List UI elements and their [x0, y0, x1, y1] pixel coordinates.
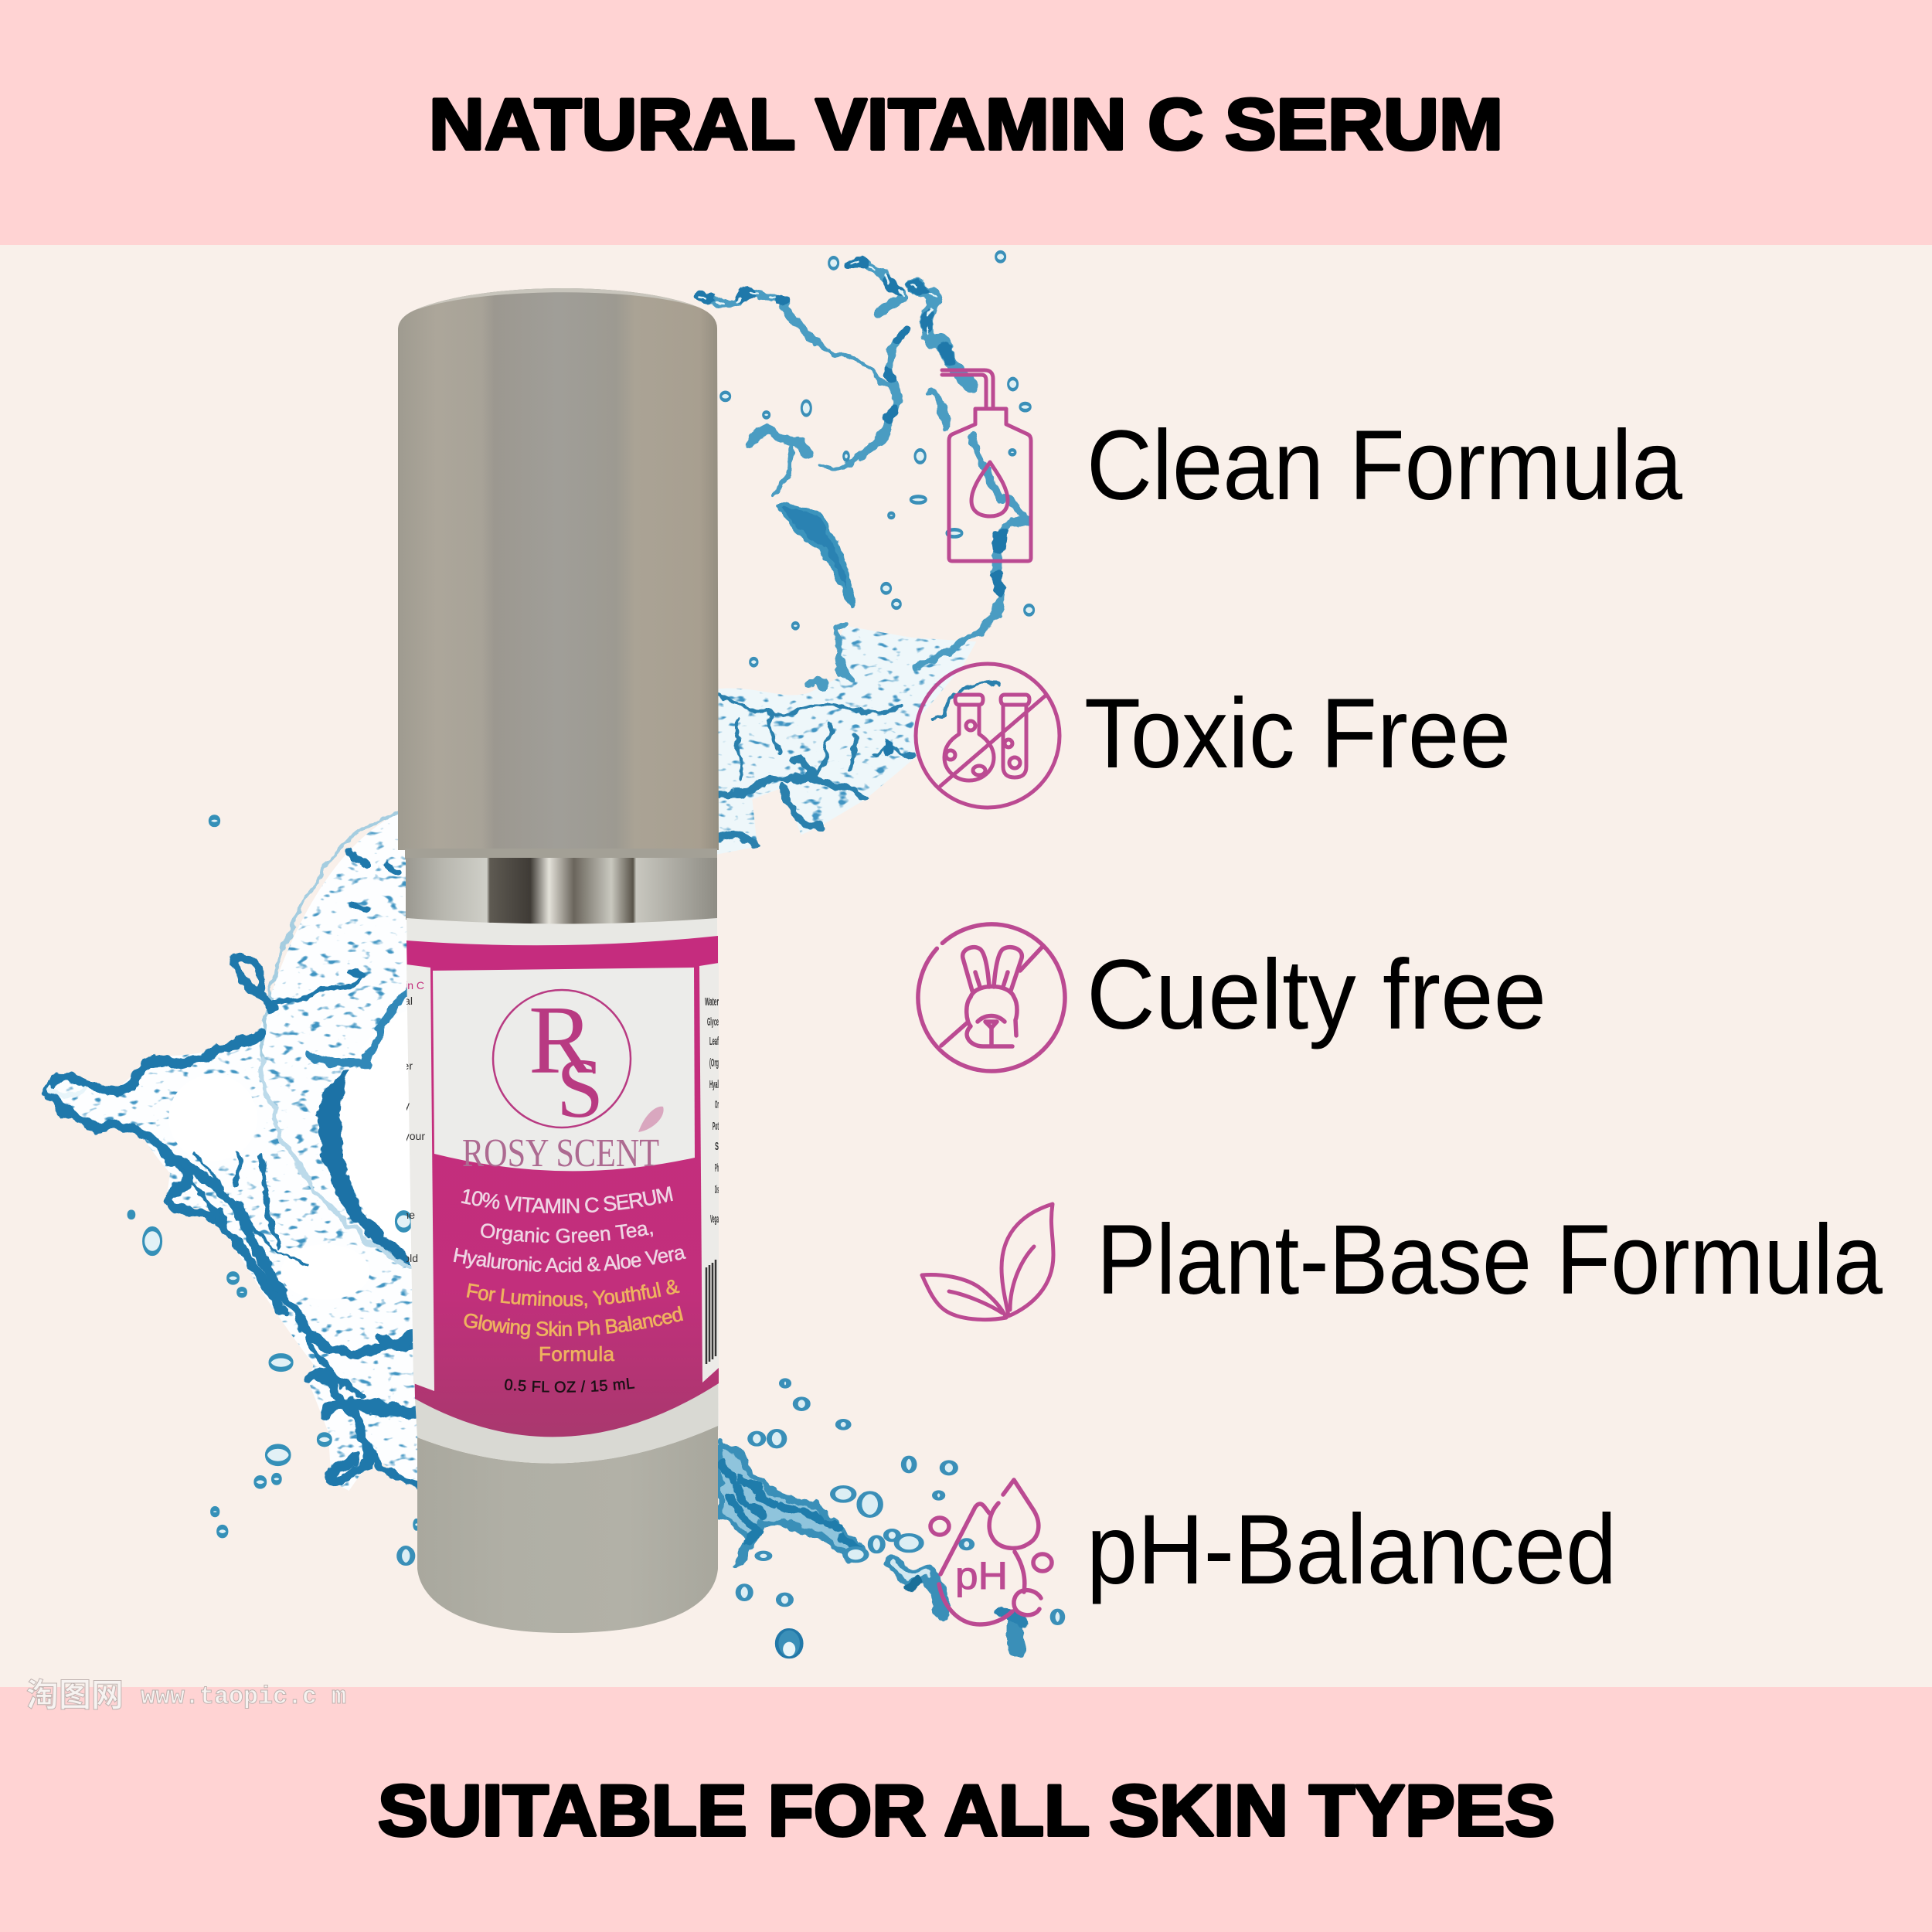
- text: (Org: [709, 1056, 719, 1070]
- bottle body: [406, 918, 719, 1463]
- label left panel: in C: [405, 979, 424, 992]
- text: Or: [715, 1098, 719, 1111]
- chrome band: [406, 858, 717, 926]
- label left panel: [406, 964, 434, 1391]
- bottom banner: [0, 1687, 1932, 1932]
- serum bottle: [398, 288, 719, 1633]
- water droplets: [400, 1379, 1063, 1658]
- watermark: 淘图网: [26, 1669, 124, 1716]
- footer heading: SUITABLE FOR ALL SKIN TYPES: [378, 1770, 1555, 1851]
- label text: Organic Green Tea,: [481, 1223, 653, 1244]
- water strands: [49, 810, 417, 1488]
- water droplets: [128, 817, 419, 1563]
- label left panel: er your: [391, 1130, 425, 1142]
- text: Dis: [715, 1183, 719, 1196]
- dark crescent: [316, 1069, 411, 1263]
- clear highlights: [168, 1007, 414, 1300]
- label left panel: y: [404, 1099, 410, 1111]
- feature: clean formula: Clean Formula: [1087, 410, 1683, 521]
- water body: [49, 807, 420, 1491]
- icon: cruelty free bunny: [918, 924, 1065, 1071]
- water sheet: [716, 626, 976, 855]
- watermark: [26, 1669, 346, 1716]
- logo R monogram: R: [529, 987, 594, 1094]
- text: Ph: [715, 1162, 719, 1175]
- water droplets: [721, 252, 1034, 665]
- top banner: [0, 0, 1932, 245]
- label text: Glowing Skin Ph Balanced: [464, 1306, 683, 1339]
- text: Hyal: [709, 1078, 719, 1091]
- splash: lower right water: [400, 1379, 1063, 1658]
- splash: upper right water: [701, 252, 1034, 855]
- splash: left water: [49, 807, 420, 1563]
- label text: Hyaluronic Acid & Aloe Vera: [453, 1247, 686, 1273]
- label text: For Luminous, Youthful &: [467, 1280, 680, 1309]
- icon label: pH: pH: [955, 1554, 1008, 1597]
- label left panel: ne: [403, 1209, 415, 1221]
- label text: Formula: [539, 1342, 615, 1366]
- barcode: [706, 1260, 716, 1364]
- title: NATURAL VITAMIN C SERUM: [429, 83, 1503, 165]
- feature: ph balanced: pH-Balanced: [1087, 1495, 1617, 1605]
- text: Vega: [710, 1213, 719, 1226]
- water strands: [701, 262, 1026, 847]
- text: Pot: [713, 1120, 719, 1133]
- label text: 0.5 FL OZ / 15 mL: [505, 1378, 635, 1393]
- bottle cap: [398, 288, 719, 850]
- label right panel: [699, 963, 719, 1383]
- feature: cruelty free: Cuelty free: [1087, 940, 1546, 1050]
- label text: [453, 1186, 686, 1393]
- watermark: www.taopic.c m: [141, 1682, 346, 1711]
- label left panel: er: [403, 1060, 413, 1072]
- text: Glyce: [707, 1015, 719, 1029]
- white strip under label: [415, 1383, 718, 1464]
- logo S monogram: S: [556, 1041, 604, 1135]
- icon: no chemicals: [916, 664, 1060, 808]
- logo circle: [493, 990, 631, 1128]
- label: [406, 936, 719, 1437]
- icon: leaves: [922, 1204, 1053, 1320]
- collar: [405, 849, 717, 859]
- cap top rim: [413, 288, 699, 311]
- feature: toxic free: Toxic Free: [1084, 679, 1511, 789]
- bottle base: [417, 1426, 718, 1633]
- text: Water: [705, 995, 719, 1009]
- label right panel: S: [715, 1140, 719, 1153]
- logo panel: [433, 968, 695, 1171]
- icon: pump bottle: [942, 370, 1031, 561]
- icon: pH drops: [930, 1480, 1052, 1624]
- label left panel: al: [404, 995, 413, 1007]
- water strand: [719, 1443, 1021, 1648]
- label text: 10% VITAMIN C SERUM: [461, 1186, 673, 1213]
- text: Leaf: [709, 1035, 719, 1048]
- petal: [638, 1107, 664, 1132]
- brand name: ROSY SCENT: [462, 1131, 659, 1175]
- label left panel: hold: [398, 1252, 418, 1264]
